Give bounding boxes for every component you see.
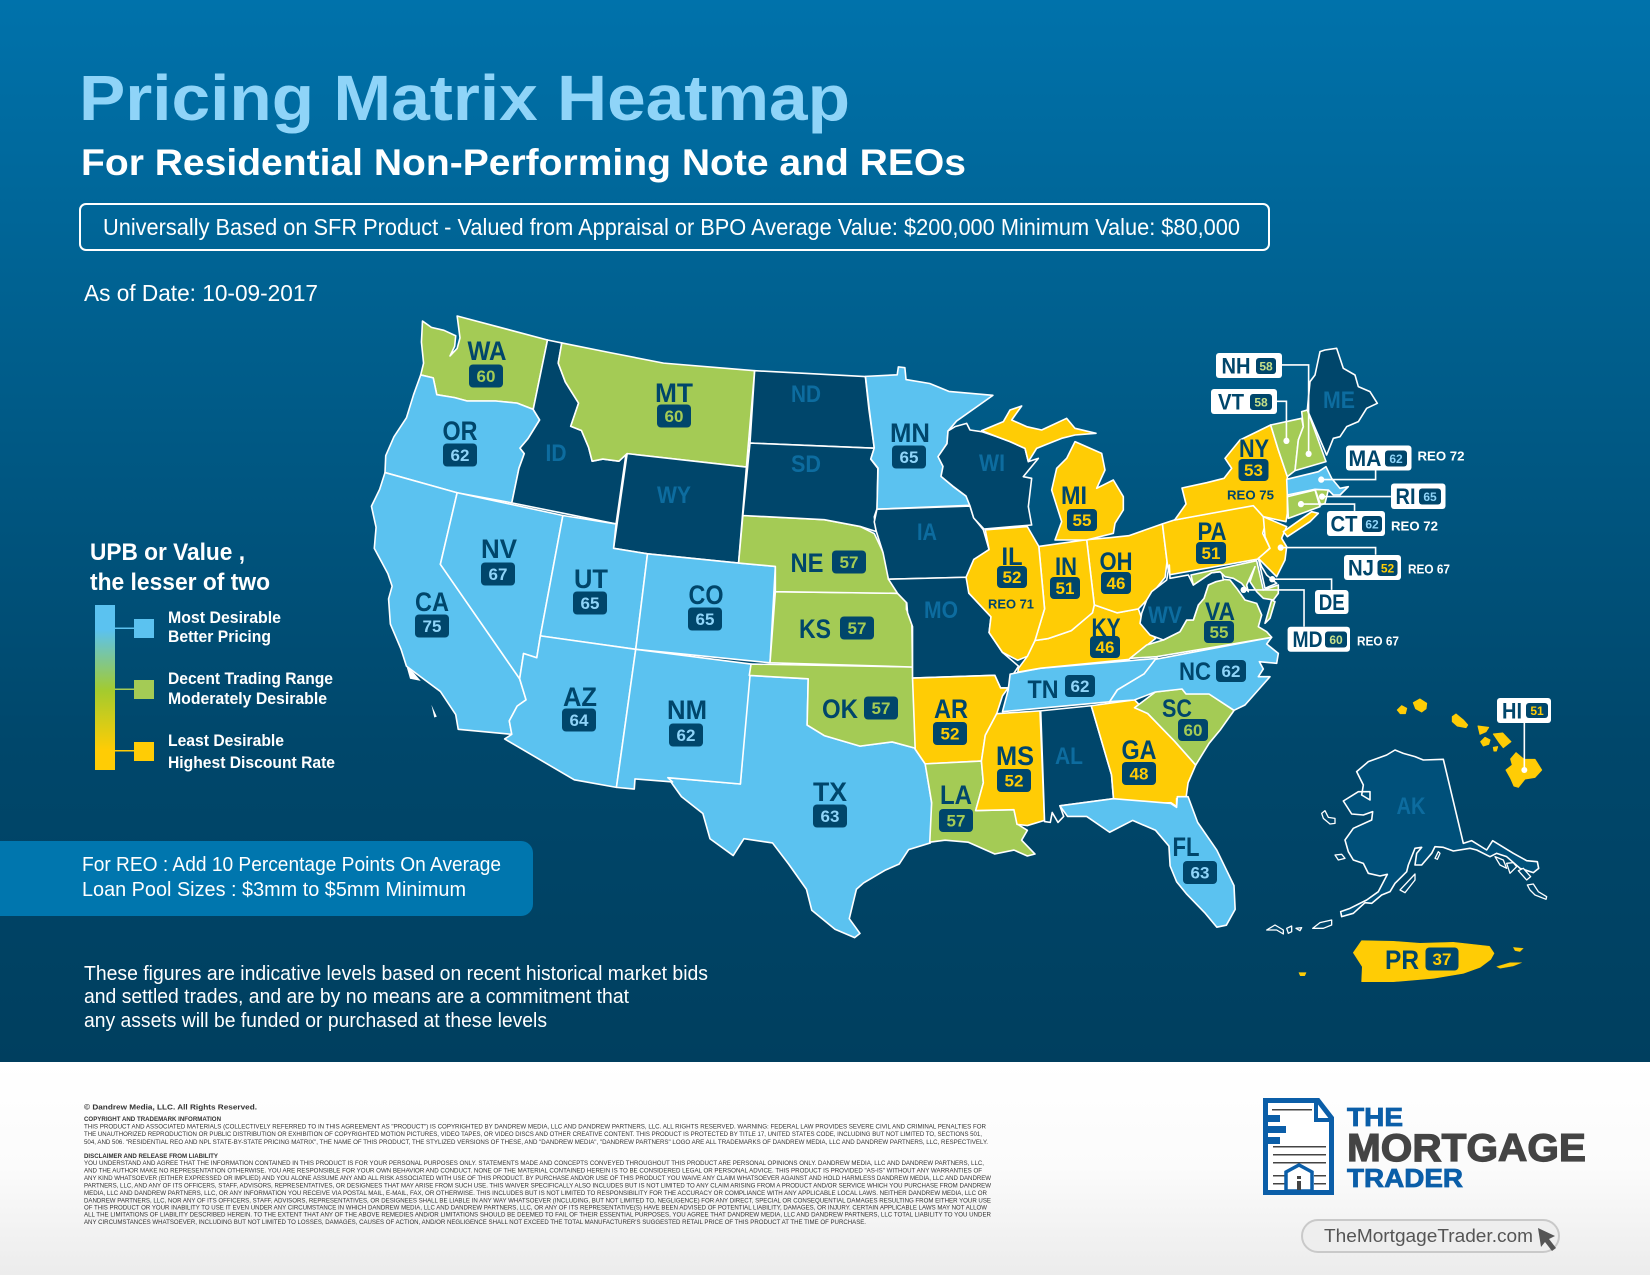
labels: muted (no data) states: ME xyxy=(1323,387,1355,414)
label: TX 63: 63 xyxy=(821,807,839,826)
label: IN 51: 51 xyxy=(1056,579,1074,598)
state: MD xyxy=(1191,561,1278,600)
labels: muted (no data) states: ID xyxy=(546,440,566,467)
label: MN 65: MN xyxy=(890,418,930,448)
callout: RI 65: 65 xyxy=(1423,490,1437,504)
map: Great Lakes states xyxy=(938,406,1123,540)
callout: CT 62 REO 72 xyxy=(1327,511,1438,536)
label: VA 55 xyxy=(1204,598,1235,643)
logo wordmark xyxy=(1347,1102,1586,1193)
callout: RI 65 xyxy=(1391,484,1446,509)
state: TN xyxy=(1002,658,1157,712)
icon: cursor xyxy=(1538,1228,1556,1251)
label: LA 57: LA xyxy=(940,780,972,810)
state: NC xyxy=(1110,637,1278,710)
label: OR 62 xyxy=(442,416,478,466)
state: ME xyxy=(1307,348,1377,455)
logo wordmark: TRADER xyxy=(1347,1163,1463,1193)
legal text: THE UNAUTHORIZED REPRODUCTION OR PUBLIC DISTRIBUTION OR EXHIBITION OF COPYRIGHTED MOTION PICTURES, VIDEO TAPES, OR VIDEO DISCS AND OTHER CREATIVE CONTENT. THIS PRODUCT IS PROTECTED BY TITLE 17, UNITED STATES CODE, INCLUDING BUT NOT LIMITED TO, SECTIONS 501, xyxy=(84,1131,982,1138)
label: IL 52 REO 71: 52 xyxy=(1003,568,1021,587)
text block: disclaimer note: and settled trades, and are by no means are a commitment that xyxy=(84,986,629,1008)
callout: MD 60 REO 67 xyxy=(1288,627,1399,652)
labels: muted (no data) states: AK xyxy=(1396,793,1426,820)
state: WV xyxy=(1140,565,1223,640)
label: MS 52 xyxy=(996,741,1034,792)
state: CA xyxy=(371,473,526,734)
label: OK 57: 57 xyxy=(872,699,890,718)
label: NY 53 REO 75: NY xyxy=(1239,435,1269,463)
callout: MA 62 REO 72: REO 72 xyxy=(1418,450,1465,464)
label: IL 52 REO 71: IL xyxy=(1002,543,1022,571)
legal text: ANY CIRCUMSTANCES WHATSOEVER, INCLUDING BUT NOT LIMITED TO LOSSES, DAMAGES, CAUSES OF ACTION, AND/OR NEGLIGENCE SHALL NOT EXCEED THE TOTAL MANUFACTURER'S SUGGESTED RETAIL PRICE OF THIS PRODUCT AT THE TIME OF PURCHASE. xyxy=(84,1219,866,1226)
label: IN 51: IN xyxy=(1055,553,1077,581)
label: WA 60: WA xyxy=(468,336,506,366)
website pill xyxy=(1302,1220,1559,1252)
label: AZ 64: 64 xyxy=(570,711,589,730)
state: PR xyxy=(1299,941,1523,982)
callout: MA 62 REO 72: 62 xyxy=(1389,452,1403,466)
label: VA 55: 55 xyxy=(1210,623,1228,642)
callout: DE: DE xyxy=(1319,590,1345,615)
state: GA xyxy=(1091,700,1196,807)
state: MN xyxy=(865,367,993,509)
label: TN 62: 62 xyxy=(1071,677,1089,696)
label: CA 75 xyxy=(415,587,449,638)
label: CO 65 xyxy=(688,580,724,630)
label: AZ 64 xyxy=(562,682,597,732)
label: PR 37 xyxy=(1385,945,1458,975)
state: AR xyxy=(913,675,1008,764)
legend item: most desirable xyxy=(115,608,281,646)
label: CO 65: 65 xyxy=(696,610,714,629)
label: NE 57: NE xyxy=(790,548,824,578)
logo wordmark: MORTGAGE xyxy=(1347,1127,1586,1170)
label: GA 48 xyxy=(1122,735,1156,785)
state: NE xyxy=(739,515,897,593)
callout: MD 60 REO 67: 60 xyxy=(1329,633,1343,647)
legal text xyxy=(84,1102,991,1226)
label: AZ 64: AZ xyxy=(563,682,597,712)
text block: disclaimer note: These figures are indicative levels based on recent historical market bids xyxy=(84,963,708,985)
legal text: YOU UNDERSTAND AND AGREE THAT THE INFORMATION CONTAINED IN THIS PRODUCT IS FOR YOUR PERSONAL PURPOSES ONLY. STATEMENTS MADE AND CONCEPTS CONVEYED THROUGHOUT THIS PRODUCT ARE PERSONAL OPINIONS ONLY. DANDREW MEDIA, LLC AND DANDREW PARTNERS, LLC, xyxy=(84,1160,984,1167)
callout: CT 62 REO 72: REO 72 xyxy=(1391,520,1438,534)
label: NM 62 xyxy=(667,695,707,746)
label: LA 57 xyxy=(939,780,973,832)
label: PR 37: 37 xyxy=(1433,950,1451,969)
label: KS 57 xyxy=(799,614,874,644)
label: MN 65 xyxy=(890,418,930,468)
label: UT 65: 65 xyxy=(581,594,599,613)
label: WA 60: 60 xyxy=(477,367,495,386)
labels: muted (no data) states: WV xyxy=(1148,602,1182,629)
legend item: most desirable: Better Pricing xyxy=(168,627,271,646)
label: SC 60: 60 xyxy=(1184,721,1202,740)
label: CA 75: 75 xyxy=(423,617,441,636)
label: OK 57: OK xyxy=(822,694,858,724)
state: ID xyxy=(512,340,626,524)
website pill: TheMortgageTrader.com xyxy=(1324,1225,1533,1246)
logo wordmark: THE xyxy=(1347,1102,1403,1132)
callout: HI 51: HI xyxy=(1502,698,1522,724)
map: New York and New England xyxy=(1175,348,1377,537)
label: KY 46: KY xyxy=(1092,614,1121,642)
legal text: ALL THE LIMITATIONS OF LIABILITY DESCRIBED HEREIN. TO THE EXTENT THAT ANY OF THE ABOVE REMEDIES AND/OR LIMITATIONS SHOULD BE DEEMED TO FAIL OF THEIR ESSENTIAL PURPOSES, YOU AGREE THAT DANDREW MEDIA, LLC AND DANDREW PARTNERS, LLC TOTAL LIABILITY TO YOU UNDER xyxy=(84,1212,991,1218)
California islands xyxy=(406,666,437,718)
state: AK xyxy=(1313,750,1547,928)
label: IN 51 xyxy=(1050,553,1080,599)
state: MT xyxy=(558,343,755,467)
legal text: DISCLAIMER AND RELEASE FROM LIABILITY xyxy=(84,1153,219,1160)
label: PR 37: PR xyxy=(1385,945,1419,975)
callout: valuation basis xyxy=(80,204,1269,250)
callout: HI 51: 51 xyxy=(1530,704,1544,718)
label: AR 52 xyxy=(933,694,968,745)
state: PA xyxy=(1162,505,1270,575)
label: NV 67: NV xyxy=(481,534,517,564)
label: MS 52: MS xyxy=(996,741,1034,771)
label: NY 53 REO 75 xyxy=(1227,435,1274,502)
label: MT 60: MT xyxy=(655,378,693,408)
callout: NH 58 xyxy=(1216,353,1282,378)
state: MA xyxy=(1287,467,1348,495)
state: MO xyxy=(888,577,1019,688)
state: WI xyxy=(938,423,1038,529)
label: FL 63 xyxy=(1172,832,1217,884)
label: MT 60: 60 xyxy=(665,407,683,426)
label: NV 67: 67 xyxy=(489,565,507,584)
legal text: THIS PRODUCT AND ASSOCIATED MATERIALS (COLLECTIVELY REFERRED TO IN THIS AGREEMENT AS "PRODUCT") IS COPYRIGHTED BY DANDREW MEDIA, LLC AND DANDREW PARTNERS, LLC. ALL RIGHTS RESERVED. WARNING: FEDERAL LAW PROVIDES SEVERE CIVIL AND CRIMINAL PENALTIES FOR xyxy=(84,1124,986,1130)
label: NE 57 xyxy=(790,548,866,578)
legend item: least desirable: Highest Discount Rate xyxy=(168,753,335,772)
label: CO 65: CO xyxy=(688,580,724,610)
label: KY 46 xyxy=(1090,614,1121,658)
label: NC 62: NC xyxy=(1179,658,1211,686)
legend item: decent trading range: Decent Trading Range xyxy=(168,669,333,688)
labels: muted (no data) states: ND xyxy=(791,381,821,408)
legend heading xyxy=(90,539,270,596)
label: MN 65: 65 xyxy=(900,448,918,467)
label: MI 55: 55 xyxy=(1073,511,1091,530)
state: IL xyxy=(966,527,1045,660)
state: RI xyxy=(1315,489,1328,505)
label: OK 57 xyxy=(822,694,898,724)
legal text: PARTNERS, LLC, AND ANY OF ITS OFFICERS, STAFF, ADVISORS, REPRESENTATIVES, OR DESIGNEES THAT MAY ARISE FROM SUCH USE. THIS WAIVER SPECIFICALLY ALSO INCLUDES BUT IS NOT LIMITED TO ANY CLAIM ARISING FROM A PRODUCT AND/OR SERVICE WHICH YOU PURCHASE FROM DANDREW xyxy=(84,1182,991,1190)
callout: MA 62 REO 72: MA xyxy=(1348,446,1382,471)
label: MI 55: MI xyxy=(1061,482,1087,510)
label: OR 62: 62 xyxy=(451,446,469,465)
state: FL xyxy=(1060,797,1235,927)
footer background xyxy=(0,1062,1650,1275)
label: NC 62: 62 xyxy=(1222,662,1240,681)
callout: VT 58: VT xyxy=(1218,390,1245,414)
label: OH 46: OH xyxy=(1100,548,1132,576)
callout: HI 51 xyxy=(1497,698,1551,724)
legend item: decent trading range xyxy=(115,669,333,708)
legal text: OF THIS PRODUCT OR YOUR INABILITY TO USE IT EVEN UNDER ANY CIRCUMSTANCE IN WHICH DANDREW MEDIA, LLC AND DANDREW PARTNERS, LLC, OR ANY OF ITS REPRESENTATIVE(S) HAVE BEEN ADVISED OF POTENTIAL LIABILITY, DAMAGES, OR INJURY. CERTAIN APPLICABLE LAWS MAY NOT ALLOW xyxy=(84,1204,987,1212)
legend heading: the lesser of two xyxy=(90,569,270,596)
label: KS 57: 57 xyxy=(848,619,866,638)
Aleutian islands xyxy=(1267,925,1302,934)
label: WA 60 xyxy=(468,336,506,388)
legal text: © Dandrew Media, LLC. All Rights Reserved. xyxy=(84,1102,257,1112)
state: NH xyxy=(1295,410,1326,471)
state: LA xyxy=(925,761,1035,856)
legal text: DANDREW PARTNERS, LLC, NOR ANY OF ITS OFFICERS, STAFF, ADVISORS, REPRESENTATIVES, OR DESIGNEES SHALL BE LIABLE IN ANY WAY WHATSOEVER (INCLUDING, BUT NOT LIMITED TO, NEGLIGENCE) FOR ANY DIRECT, SPECIAL OR CONSEQUENTIAL DAMAGES RESULTING FROM EITHER YOUR USE xyxy=(84,1198,991,1204)
subtitle: For Residential Non-Performing Note and REOs xyxy=(81,142,966,183)
title: Pricing Matrix Heatmap xyxy=(79,62,850,134)
callout: VT 58 xyxy=(1211,389,1277,414)
legal text: AND THE AUTHOR MAKE NO REPRESENTATION OTHERWISE. YOU ARE RESPONSIBLE FOR YOUR OWN BEHAVIOR AND CONDUCT. NONE OF THE MATERIAL CONTAINED HEREIN IS TO BE CONSIDERED LEGAL OR PERSONAL ADVICE. THIS PRODUCT IS PROVIDED "AS-IS" WITHOUT ANY WARRANTIES OF xyxy=(84,1168,982,1174)
label: TN 62 xyxy=(1028,675,1095,704)
state: NJ xyxy=(1258,517,1287,577)
labels: muted (no data) states: IA xyxy=(917,519,937,546)
label: MS 52: 52 xyxy=(1005,772,1023,790)
label: LA 57: 57 xyxy=(947,812,965,830)
label: FL 63: 63 xyxy=(1191,864,1209,882)
labels: muted (no data) states xyxy=(546,381,1426,820)
label: KY 46: 46 xyxy=(1096,638,1114,657)
label: NY 53 REO 75: 53 xyxy=(1244,461,1263,480)
state: AL xyxy=(1041,706,1113,822)
labels: muted (no data) states: MO xyxy=(924,597,958,624)
label: GA 48: GA xyxy=(1122,735,1156,765)
state: WA xyxy=(421,316,547,409)
state: CO xyxy=(636,554,775,663)
state: WY xyxy=(614,454,746,563)
state: IN xyxy=(1035,540,1094,641)
labels: muted (no data) states: SD xyxy=(791,451,821,478)
label: UT 65 xyxy=(573,564,608,614)
labels: muted (no data) states: WI xyxy=(979,450,1005,477)
state: SD xyxy=(743,443,878,531)
leader lines xyxy=(1241,365,1391,627)
legend item: least desirable xyxy=(115,731,335,772)
label: GA 48: 48 xyxy=(1130,764,1148,784)
state: MI xyxy=(982,406,1123,540)
map: western states xyxy=(371,316,932,938)
label: NM 62: 62 xyxy=(677,726,695,745)
label: NE 57: 57 xyxy=(840,553,858,572)
state: TX xyxy=(668,675,932,938)
state: UT xyxy=(540,515,647,649)
state: SC xyxy=(1134,689,1234,765)
callout: MD 60 REO 67: REO 67 xyxy=(1357,634,1399,648)
state: NM xyxy=(616,649,751,789)
label: UT 65: UT xyxy=(574,564,608,594)
state: NY xyxy=(1175,425,1318,537)
state: IA xyxy=(874,506,989,579)
label: MI 55 xyxy=(1061,482,1097,531)
callout: MD 60 REO 67: MD xyxy=(1292,627,1322,652)
legal text: ANY KIND WHATSOEVER (EITHER EXPRESSED OR IMPLIED) AND YOU ALONE ASSUME ANY AND ALL RISK ASSOCIATED WITH USE OF THIS PRODUCT. BY PURCHASE AND/OR USE OF THIS PRODUCT YOU WAIVE ANY CLAIM WHATSOEVER AGAINST AND HOLD HARMLESS DANDREW MEDIA, LLC AND DANDREW xyxy=(84,1175,991,1182)
label: NM 62: NM xyxy=(667,695,707,725)
callout: CT 62 REO 72: 62 xyxy=(1365,518,1379,532)
state: MS xyxy=(976,711,1045,826)
state: VA xyxy=(1130,579,1275,658)
text block: disclaimer note xyxy=(84,963,708,1032)
callout: VT 58: 58 xyxy=(1254,396,1268,410)
label: KS 57: KS xyxy=(799,614,831,644)
Hawaii leader xyxy=(1521,722,1527,773)
state: OR xyxy=(385,375,540,503)
icon: document with house xyxy=(1265,1100,1332,1192)
logo: The Mortgage Trader xyxy=(1265,1100,1586,1252)
label: AR 52: 52 xyxy=(941,724,959,744)
callout: CT 62 REO 72: CT xyxy=(1330,512,1358,536)
label: TX 63: TX xyxy=(813,777,847,807)
state: KY xyxy=(1018,605,1156,672)
label: AR 52: AR xyxy=(934,694,968,724)
legal text: COPYRIGHT AND TRADEMARK INFORMATION xyxy=(84,1116,221,1123)
callout: NJ 52 REO 67: 52 xyxy=(1381,562,1394,576)
state: VT xyxy=(1271,418,1303,477)
label: OH 46 xyxy=(1100,548,1132,594)
state: NV xyxy=(440,493,563,679)
legend item: least desirable: Least Desirable xyxy=(168,731,284,750)
text block: disclaimer note: any assets will be funded or purchased at these levels xyxy=(84,1010,547,1032)
label: IL 52 REO 71: REO 71 xyxy=(988,598,1034,612)
label: PA 51 xyxy=(1196,518,1226,564)
callout: NH 58: 58 xyxy=(1259,360,1273,374)
state: ND xyxy=(750,371,874,448)
callout: RI 65: RI xyxy=(1396,484,1416,509)
labels: muted (no data) states: WY xyxy=(657,482,691,509)
callout: NJ 52 REO 67: NJ xyxy=(1348,556,1374,580)
callout: NJ 52 REO 67 xyxy=(1344,555,1450,580)
as-of date: As of Date: 10-09-2017 xyxy=(84,280,318,306)
label: PA 51: PA xyxy=(1198,518,1226,546)
legend gradient bar xyxy=(95,605,115,770)
state: AZ xyxy=(505,636,636,787)
label: SC 60 xyxy=(1162,695,1208,741)
panel: REO note: Loan Pool Sizes : $3mm to $5mm Minimum xyxy=(82,879,466,901)
label: IL 52 REO 71 xyxy=(988,543,1034,612)
state: DE xyxy=(1258,558,1277,588)
callout: valuation basis: Universally Based on SFR Product - Valued from Appraisal or BPO Average Value: $200,000 Minimum Value: $80,000 xyxy=(103,214,1240,240)
map: Hawaii, Puerto Rico, Aleutians xyxy=(1267,699,1542,982)
legend item: decent trading range: Moderately Desirable xyxy=(168,689,327,708)
label: PA 51: 51 xyxy=(1202,544,1220,563)
state: OH xyxy=(1087,524,1167,613)
legend heading: UPB or Value , xyxy=(90,539,245,566)
labels: muted (no data) states: AL xyxy=(1055,743,1083,770)
panel: REO note: For REO : Add 10 Percentage Points On Average xyxy=(82,854,501,876)
state: KS xyxy=(770,592,912,667)
panel: legend xyxy=(90,539,335,772)
label: MT 60 xyxy=(655,378,693,428)
label: FL 63: FL xyxy=(1172,832,1200,862)
label: OR 62: OR xyxy=(442,416,478,446)
map: central and southern states xyxy=(865,367,1270,927)
legal text: MEDIA, LLC AND DANDREW PARTNERS, LLC, OR ANY INFORMATION YOU RECEIVE VIA POSTAL MAIL, E-MAIL, FAX, OR OTHERWISE. THIS INCLUDES BUT IS NOT LIMITED TO RESPONSIBILITY FOR THE ACCURACY OR COMPLIANCE WITH ANY APPLICABLE LOCAL LAWS. NEITHER DANDREW MEDIA, LLC OR xyxy=(84,1190,987,1197)
callout: NJ 52 REO 67: REO 67 xyxy=(1408,562,1450,576)
label: CA 75: CA xyxy=(415,587,449,617)
callout: MA 62 REO 72 xyxy=(1346,446,1465,471)
label: NV 67 xyxy=(481,534,517,586)
state: CT xyxy=(1287,490,1320,518)
map: mid-Atlantic states xyxy=(1110,517,1287,710)
legend item: most desirable: Most Desirable xyxy=(168,608,281,627)
label: TN 62: TN xyxy=(1028,676,1058,704)
state: OK xyxy=(749,664,915,748)
label: TX 63 xyxy=(813,777,847,828)
label: NY 53 REO 75: REO 75 xyxy=(1227,488,1274,502)
label: SC 60: SC xyxy=(1162,695,1192,723)
legal text: 504, AND 506. "RESIDENTIAL REO AND NPL STATE-BY-STATE PRICING MATRIX", THE NAME OF THIS PRODUCT, THE STYLIZED VERSIONS OF THESE, AND "DANDREW MEDIA", "DANDREW PARTNERS" LOGO ARE ALL TRADEMARKS OF DANDREW MEDIA, LLC AND DANDREW PARTNERS, LLC, RESPECTIVELY. xyxy=(84,1139,988,1146)
label: OH 46: 46 xyxy=(1107,574,1125,593)
label: VA 55: VA xyxy=(1205,598,1235,626)
panel: REO note xyxy=(0,841,533,916)
callout: NH 58: NH xyxy=(1222,354,1250,378)
state: HI xyxy=(1397,699,1542,787)
label: NC 62 xyxy=(1179,658,1246,686)
